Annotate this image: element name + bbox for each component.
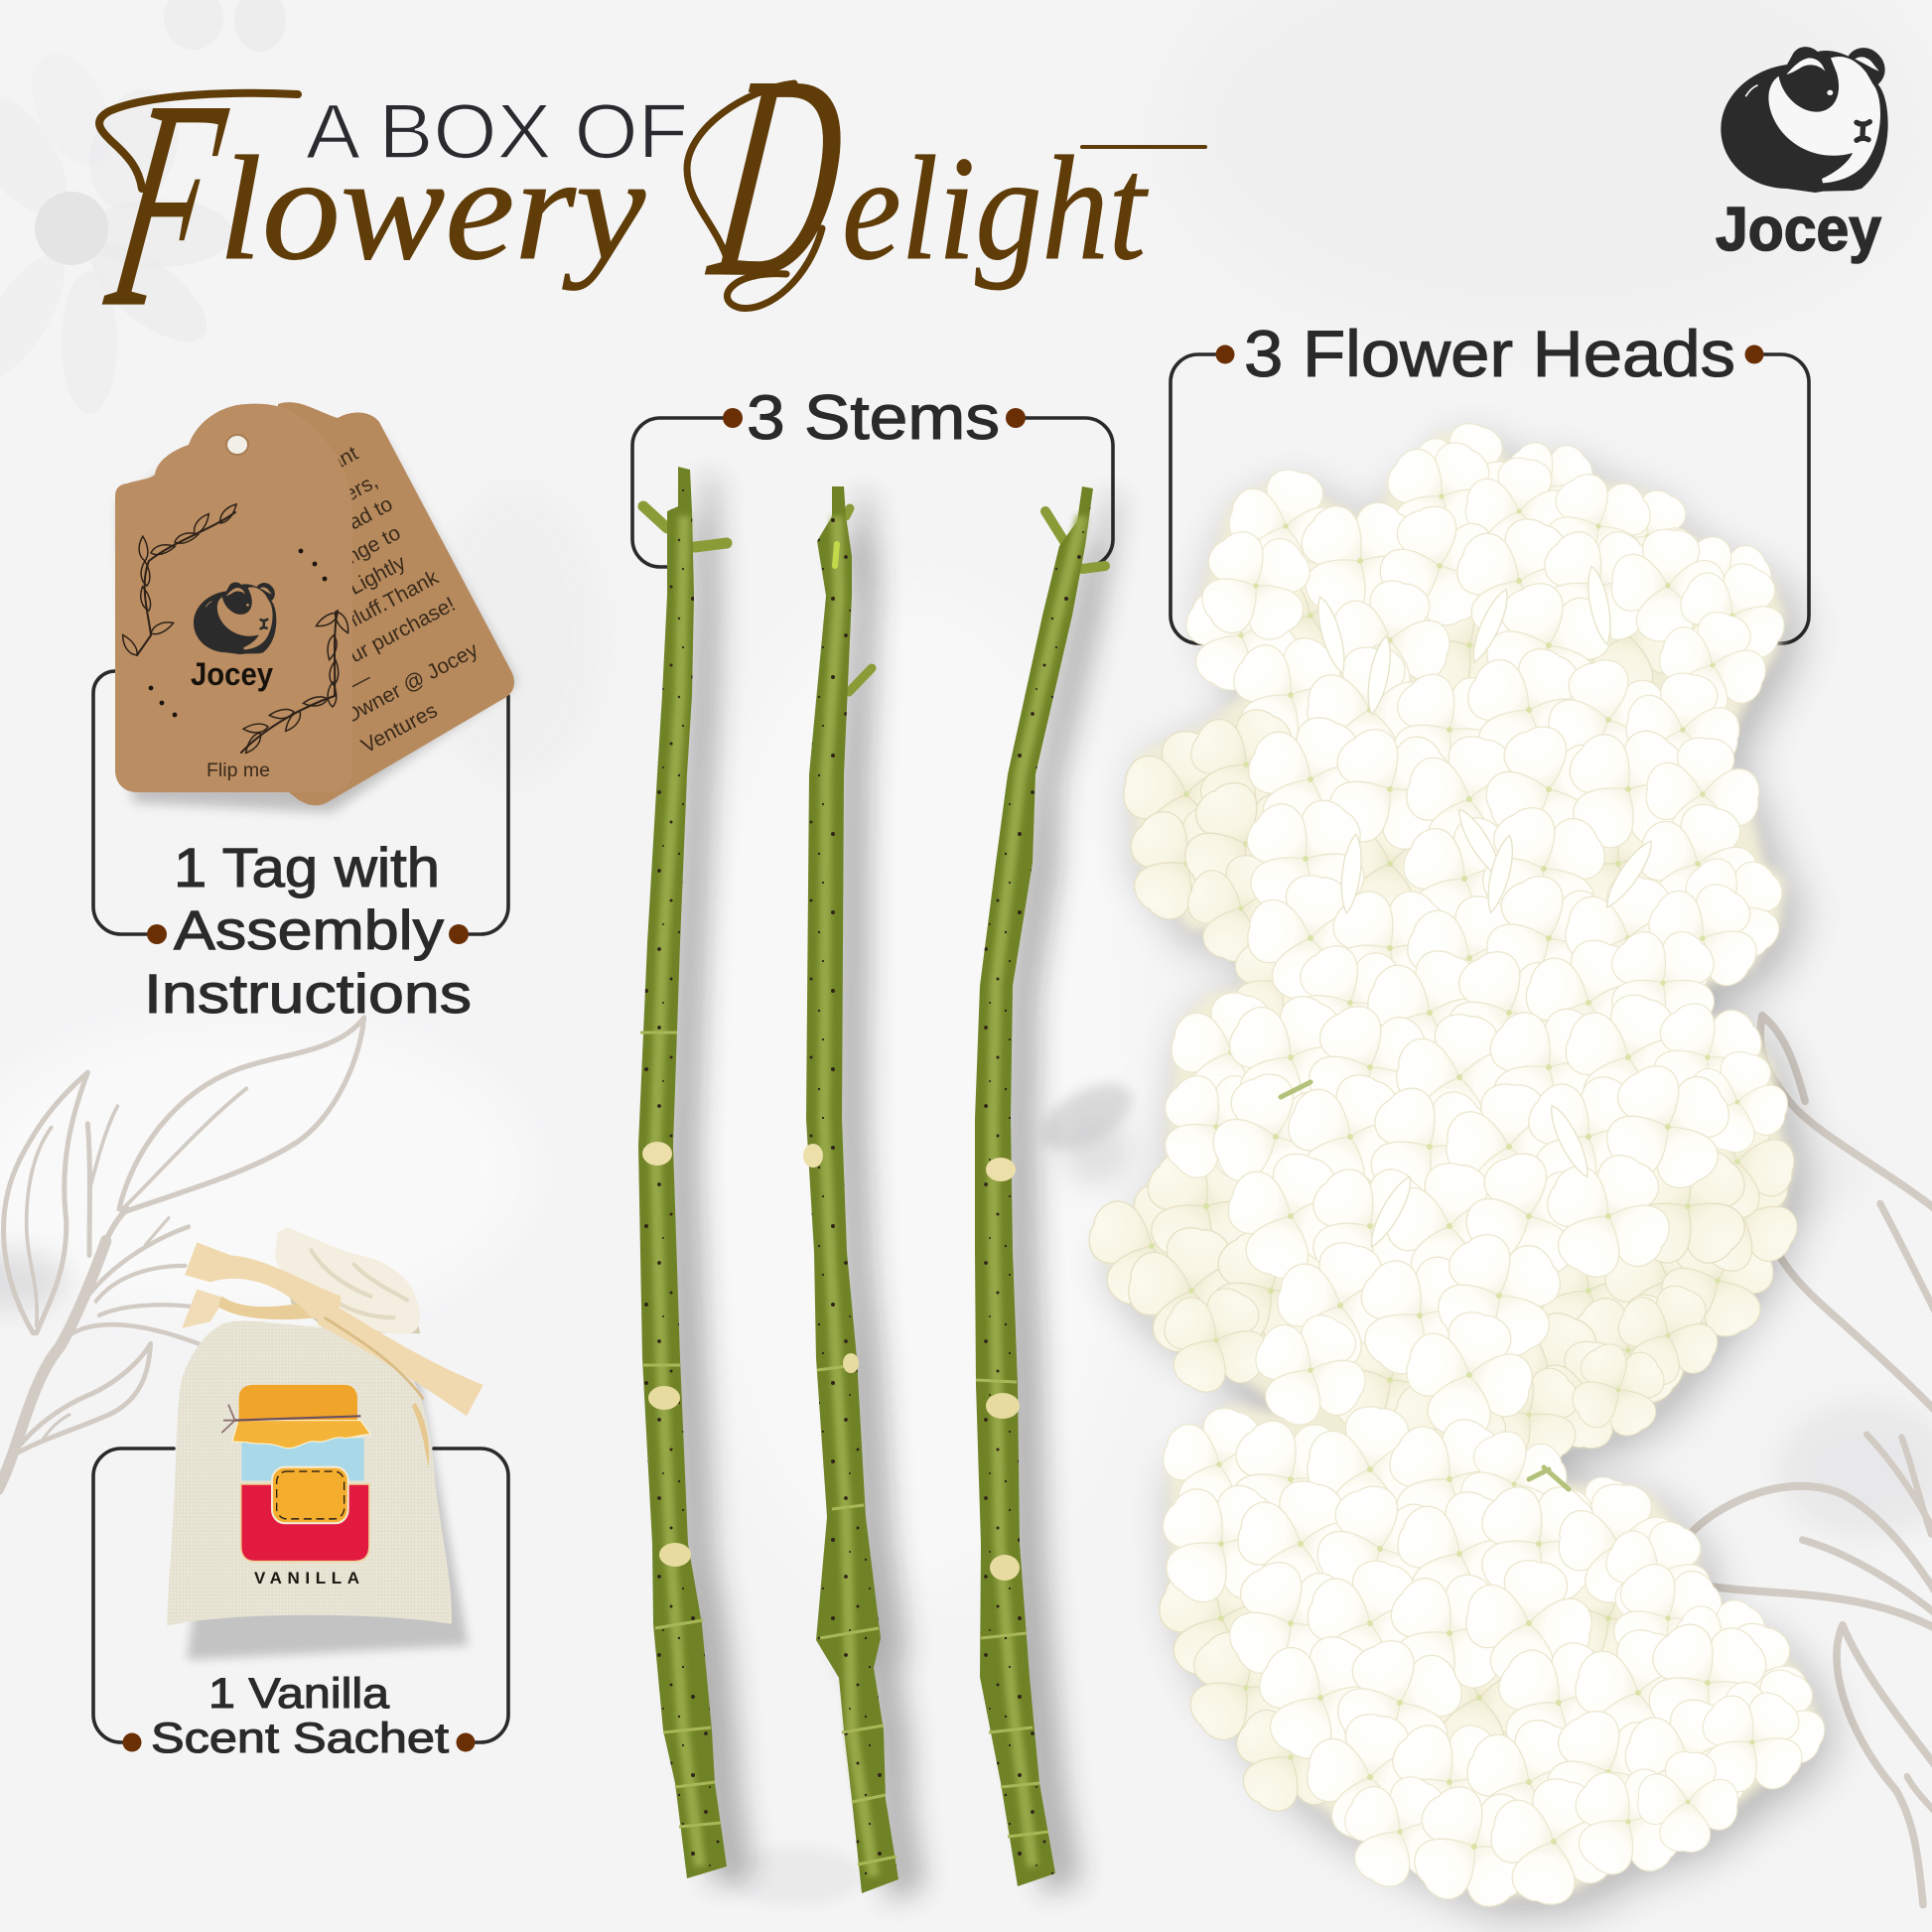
label: tag: Assembly [174, 898, 444, 961]
panel: vanilla sachet [93, 1227, 508, 1762]
tag hole [226, 435, 248, 455]
title script: Flowery Delight: elight [842, 126, 1149, 291]
wreath dots [149, 549, 327, 717]
sachet frill [275, 1227, 420, 1333]
sachet frill shadow [285, 1268, 420, 1333]
label: tag [144, 836, 472, 1025]
tag shadow [119, 415, 517, 812]
back tag text: nge to [343, 521, 404, 569]
back tag text: ant [326, 442, 361, 476]
stem 2 [803, 486, 898, 1893]
back tag text: our purchase! [336, 593, 459, 673]
flower heads [1071, 409, 1843, 1932]
back tag text: — [345, 666, 374, 696]
title script: Flowery Delight: D [696, 16, 862, 338]
flower head 3 [1071, 972, 1819, 1496]
panel: tag with assembly instructions [93, 402, 517, 1025]
back tag text [326, 442, 483, 758]
back tag text: Owner @ Jocey [340, 638, 483, 729]
plant outline: left [0, 1018, 364, 1489]
panel: stems bracket [632, 383, 1113, 567]
stem 3 [975, 486, 1105, 1886]
back tag text: Lightly [345, 551, 410, 600]
heading: 3 Stems: 3 Stems [747, 383, 1000, 453]
stem 1 [638, 467, 727, 1878]
sachet word: VANILLA [254, 1569, 359, 1587]
back tag text: Ventures [357, 699, 441, 758]
title script: Flowery Delight: lowery [218, 126, 645, 291]
sachet shadow [187, 1340, 469, 1660]
flower head 4 [1133, 1391, 1843, 1932]
plant outline: right [1693, 1016, 1932, 1904]
bracket [93, 1449, 508, 1751]
background daisy: top left [0, 0, 286, 414]
label: tag: 1 Tag with [174, 836, 440, 898]
wreath left [119, 501, 239, 658]
label: sachet: 1 Vanilla [208, 1670, 389, 1718]
tag caption: Flip me [207, 760, 270, 781]
bracket [93, 671, 508, 944]
logo wordmark: Jocey [1716, 196, 1881, 264]
tag logo wordmark: Jocey [191, 656, 273, 692]
flower base mass [1097, 432, 1821, 1898]
title line: A BOX OF: A BOX OF [306, 87, 688, 175]
wreath right [241, 610, 352, 756]
sachet body [167, 1320, 452, 1626]
label: sachet: Scent Sachet [151, 1715, 449, 1762]
front tag [115, 404, 352, 792]
stem shadows [664, 475, 1119, 1901]
title script: Flowery Delight: F [90, 39, 242, 368]
back tag text: fluff.Thank [345, 566, 443, 631]
flower head 1 [1165, 409, 1805, 813]
back tag text: ers, [341, 470, 381, 506]
label: tag: Instructions [144, 962, 472, 1025]
logo: Jocey [1716, 47, 1888, 264]
label: sachet [151, 1670, 449, 1762]
tag logo icon [194, 582, 276, 654]
stems [638, 467, 1119, 1901]
ribbon [182, 1242, 483, 1468]
panel: flower heads bracket [1171, 317, 1809, 643]
back tag [278, 402, 514, 805]
flower head 2 [1103, 688, 1807, 1098]
heading: 3 Flower Heads: 3 Flower Heads [1244, 317, 1735, 390]
title [90, 16, 1205, 368]
icon: guinea pig [1721, 47, 1888, 193]
back tag text: ad to [345, 492, 396, 534]
jar illustration [221, 1385, 370, 1562]
title script: Flowery Delight [90, 16, 1205, 368]
flower shadow [1107, 446, 1831, 1912]
sachet illustration [167, 1227, 483, 1660]
flower side petals and stalks [1281, 565, 1659, 1489]
